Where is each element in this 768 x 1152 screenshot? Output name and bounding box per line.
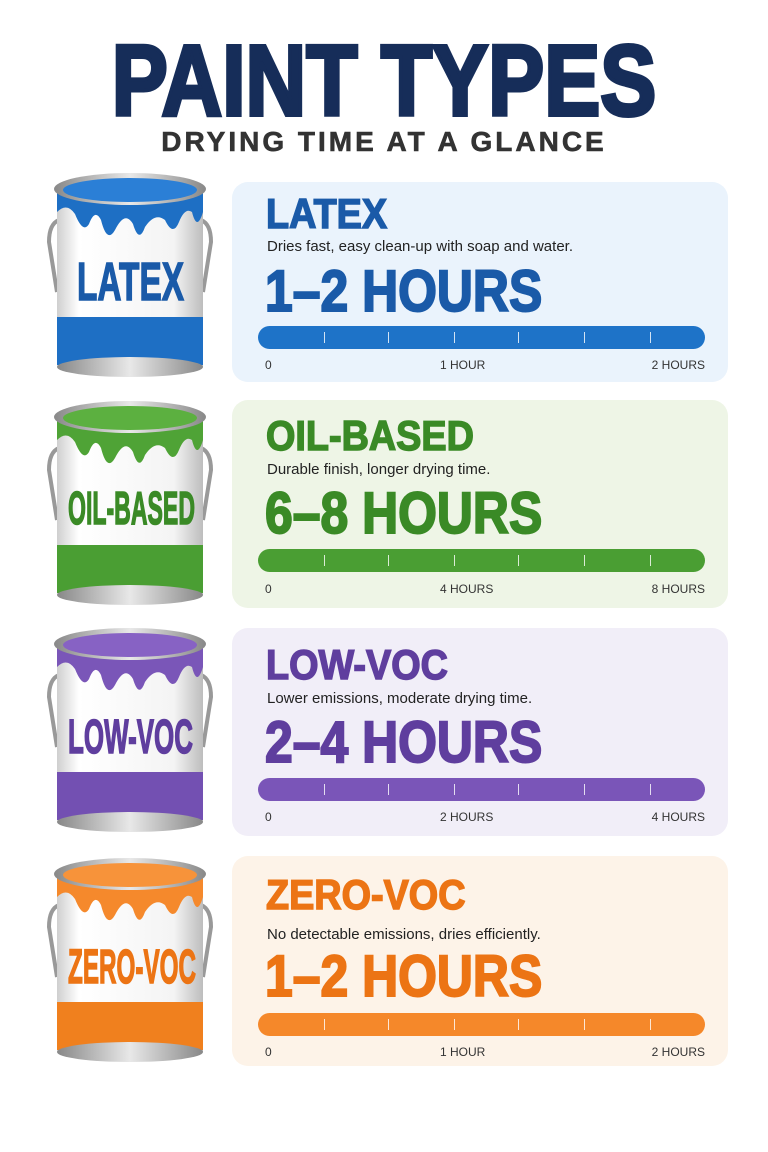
heading: low-voc: LOW-VOC <box>266 641 448 688</box>
description: Durable finish, longer drying time. <box>267 461 490 478</box>
bar: progress <box>258 778 705 801</box>
panel: zero-voc <box>232 856 728 1066</box>
heading: latex: LATEX <box>266 190 387 237</box>
axis labels <box>265 358 705 372</box>
icon: low-voc paint can <box>47 628 213 832</box>
icon: oil-based paint can <box>47 401 213 605</box>
axis labels <box>265 1045 705 1059</box>
bar: progress <box>258 1013 705 1036</box>
bar: progress <box>258 549 705 572</box>
title: PAINT TYPES <box>112 25 656 137</box>
description: Lower emissions, moderate drying time. <box>267 690 532 707</box>
heading: zero-voc: ZERO-VOC <box>266 871 466 918</box>
panel: latex <box>232 182 728 382</box>
axis labels <box>265 582 705 596</box>
heading: oil-based: OIL-BASED <box>266 412 474 459</box>
hours: 2–4 HOURS <box>265 710 542 775</box>
panel: low-voc <box>232 628 728 836</box>
hours: 6–8 HOURS <box>265 481 542 546</box>
subtitle: DRYING TIME AT A GLANCE <box>161 126 607 157</box>
bar: progress <box>258 326 705 349</box>
axis labels: 1 HOUR <box>440 1045 485 1059</box>
axis labels: 0 <box>265 358 272 372</box>
panel: oil-based <box>232 400 728 608</box>
axis labels <box>265 810 705 824</box>
hours: 1–2 HOURS <box>265 259 542 324</box>
axis labels: 0 <box>265 582 272 596</box>
axis labels: 2 HOURS <box>652 1045 705 1059</box>
axis labels: 4 HOURS <box>652 810 705 824</box>
icon: zero-voc paint can <box>47 858 213 1062</box>
hours: 1–2 HOURS <box>265 944 542 1009</box>
axis labels: 4 HOURS <box>440 582 493 596</box>
icon: latex paint can <box>47 173 213 377</box>
description: No detectable emissions, dries efficiently. <box>267 926 541 943</box>
axis labels: 2 HOURS <box>652 358 705 372</box>
axis labels: 8 HOURS <box>652 582 705 596</box>
axis labels: 1 HOUR <box>440 358 485 372</box>
axis labels: 0 <box>265 1045 272 1059</box>
axis labels: 2 HOURS <box>440 810 493 824</box>
description: Dries fast, easy clean-up with soap and water. <box>267 238 573 255</box>
axis labels: 0 <box>265 810 272 824</box>
